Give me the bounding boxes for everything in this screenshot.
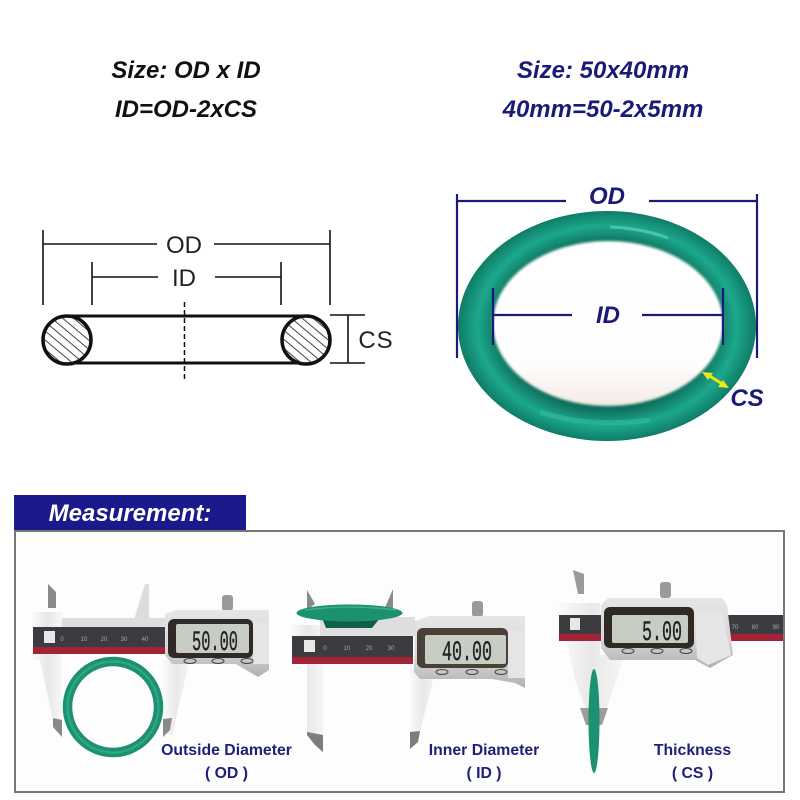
caliper: outside diameter: 10 xyxy=(81,637,88,643)
caption: outside diameter: Outside Diameter xyxy=(161,742,292,759)
caption: inner diameter: ( ID ) xyxy=(466,765,502,782)
caption: outside diameter xyxy=(161,742,292,782)
banner: measurement: Measurement: xyxy=(49,500,211,527)
caliper: thickness: 80 xyxy=(752,625,759,631)
panel: measurement photos xyxy=(15,531,784,792)
caption: inner diameter: Inner Diameter xyxy=(429,742,539,759)
caliper: inner diameter: 40.00 xyxy=(442,638,492,669)
caption: thickness xyxy=(654,742,731,782)
caption: thickness: Thickness xyxy=(654,742,731,759)
diagram: o-ring cross section xyxy=(43,230,394,380)
caliper: outside diameter: 0 xyxy=(60,637,64,643)
caliper: outside diameter xyxy=(32,584,269,752)
caliper: thickness: 90 xyxy=(773,625,780,631)
caliper: outside diameter: 20 xyxy=(101,637,108,643)
caliper: inner diameter xyxy=(292,589,525,752)
caliper: inner diameter: 20 xyxy=(366,646,373,652)
photo: green o-ring with dimensions: CS xyxy=(730,385,764,412)
heading: formula: ID=OD-2xCS xyxy=(115,96,257,123)
caliper: thickness: 5.00 xyxy=(642,618,682,649)
banner: measurement xyxy=(14,495,246,530)
heading: formula xyxy=(111,57,261,123)
diagram: o-ring cross section: ID xyxy=(172,265,196,292)
caliper: outside diameter: 50.00 xyxy=(192,628,238,659)
caliper: inner diameter: 30 xyxy=(388,646,395,652)
caption: outside diameter: ( OD ) xyxy=(205,765,248,782)
caliper: outside diameter: 40 xyxy=(142,637,149,643)
diagram: o-ring cross section: CS xyxy=(358,327,394,354)
diagram: o-ring cross section: OD xyxy=(166,232,202,259)
caption: thickness: ( CS ) xyxy=(672,765,713,782)
caliper: outside diameter: 30 xyxy=(121,637,128,643)
caliper: thickness xyxy=(558,570,783,773)
heading: example xyxy=(502,57,703,123)
caliper: inner diameter: 0 xyxy=(323,646,327,652)
caliper: thickness: 70 xyxy=(732,625,739,631)
photo: green o-ring with dimensions xyxy=(457,183,764,441)
photo: green o-ring with dimensions: OD xyxy=(589,183,625,210)
caliper: inner diameter: 10 xyxy=(344,646,351,652)
photo: green o-ring with dimensions: ID xyxy=(596,302,620,329)
heading: formula: Size: OD x ID xyxy=(111,57,261,84)
heading: example: Size: 50x40mm xyxy=(517,57,689,84)
heading: example: 40mm=50-2x5mm xyxy=(502,96,703,123)
caption: inner diameter xyxy=(429,742,539,782)
